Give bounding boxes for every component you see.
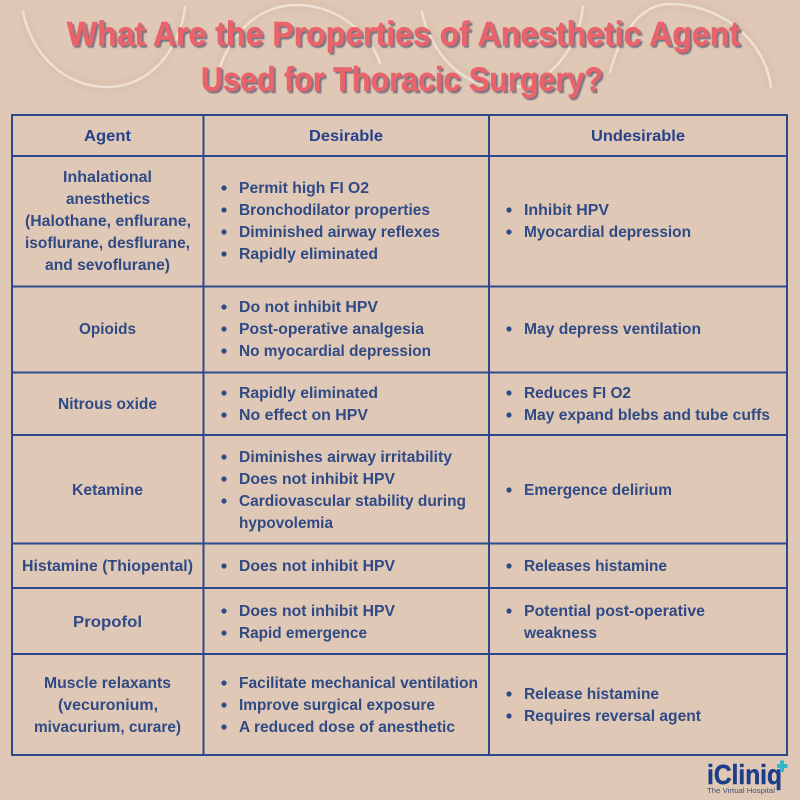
row: ketamine: Ketamine	[72, 482, 143, 499]
row: propofol: Does not inhibit HPV	[239, 603, 395, 620]
title: Used for Thoracic Surgery?	[201, 61, 603, 99]
row: inhalational anesthetics: Rapidly eliminated	[239, 246, 378, 263]
row: propofol: Potential post-operative	[524, 603, 705, 620]
row: opioids: May depress ventilation	[524, 321, 701, 338]
row: propofol: weakness	[523, 625, 597, 642]
row: muscle relaxants: Requires reversal agent	[524, 708, 702, 725]
table header: Desirable	[309, 128, 383, 145]
row: muscle relaxants: A reduced dose of anesthetic	[239, 719, 455, 736]
row: nitrous oxide: Rapidly eliminated	[239, 385, 378, 402]
row: histamine: Histamine (Thiopental)	[22, 558, 193, 575]
table grid	[12, 115, 787, 755]
logo: iCliniq: The Virtual Hospital	[707, 786, 775, 795]
row: nitrous oxide: No effect on HPV	[239, 407, 368, 424]
row: inhalational anesthetics: isoflurane, desflurane,	[25, 235, 190, 252]
row: ketamine: Cardiovascular stability during	[239, 493, 466, 510]
logo: iCliniq: iCliniq	[707, 759, 782, 790]
title	[67, 16, 740, 99]
row: muscle relaxants: Release histamine	[524, 686, 659, 703]
title: What Are the Properties of Anesthetic Agent	[67, 16, 740, 54]
row: ketamine: Does not inhibit HPV	[239, 471, 395, 488]
row: inhalational anesthetics: Bronchodilator properties	[239, 202, 430, 219]
row: muscle relaxants: Muscle relaxants	[44, 675, 171, 692]
row: inhalational anesthetics: Diminished airway reflexes	[239, 224, 440, 241]
row: opioids: Post-operative analgesia	[239, 321, 424, 338]
row: opioids: No myocardial depression	[239, 343, 431, 360]
row: opioids	[79, 299, 701, 360]
row: inhalational anesthetics: and sevoflurane)	[45, 257, 170, 274]
row: inhalational anesthetics: Inhalational	[63, 169, 152, 186]
table header	[84, 128, 685, 145]
row: nitrous oxide: Nitrous oxide	[58, 396, 157, 413]
table header: Agent	[84, 128, 132, 145]
row: inhalational anesthetics	[25, 169, 691, 274]
row: muscle relaxants: (vecuronium,	[58, 697, 158, 714]
row: nitrous oxide: Reduces FI O2	[524, 385, 631, 402]
row: ketamine: hypovolemia	[239, 515, 333, 532]
row: ketamine: Diminishes airway irritability	[239, 449, 452, 466]
row: inhalational anesthetics: Permit high FI O2	[239, 180, 369, 197]
row: histamine: Releases histamine	[524, 558, 667, 575]
row: opioids: Do not inhibit HPV	[239, 299, 378, 316]
row: propofol: Rapid emergence	[239, 625, 367, 642]
row: propofol	[73, 603, 705, 642]
decorative arcs	[23, 4, 771, 88]
row: muscle relaxants	[34, 675, 702, 736]
row: inhalational anesthetics: Myocardial depression	[524, 224, 691, 241]
row: muscle relaxants: Facilitate mechanical ventilation	[239, 675, 478, 692]
row: inhalational anesthetics: anesthetics	[66, 191, 150, 208]
row: histamine: Does not inhibit HPV	[239, 558, 395, 575]
row: nitrous oxide	[58, 385, 770, 424]
row: nitrous oxide: May expand blebs and tube cuffs	[524, 407, 770, 424]
row: inhalational anesthetics: (Halothane, enflurane,	[25, 213, 191, 230]
row: propofol: Propofol	[73, 614, 142, 631]
row: inhalational anesthetics: Inhibit HPV	[524, 202, 609, 219]
table header: Undesirable	[591, 128, 685, 145]
row: histamine	[22, 558, 667, 575]
row: muscle relaxants: mivacurium, curare)	[34, 719, 181, 736]
row: opioids: Opioids	[79, 321, 136, 338]
row: ketamine	[72, 449, 672, 532]
row: muscle relaxants: Improve surgical exposure	[239, 697, 435, 714]
row: ketamine: Emergence delirium	[524, 482, 672, 499]
